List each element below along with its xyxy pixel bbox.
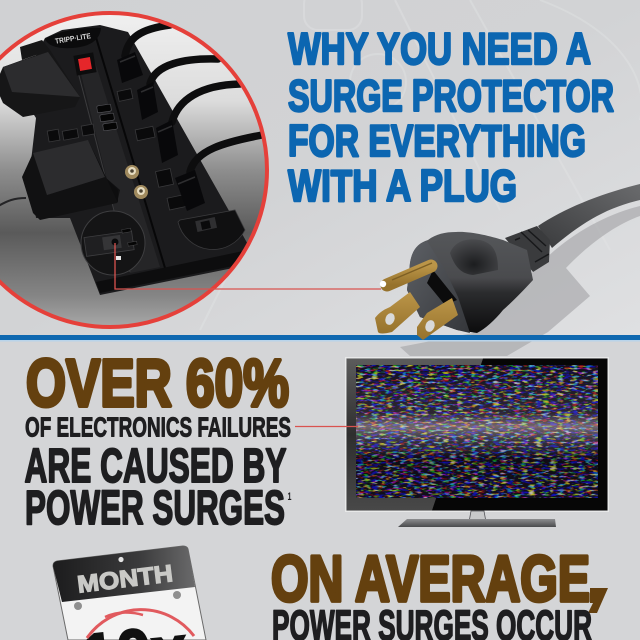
icon: electrical plug — [375, 184, 640, 340]
right blade — [417, 298, 458, 340]
tv stand — [398, 519, 556, 527]
lower left outlet — [81, 211, 145, 275]
title — [288, 25, 614, 211]
title line 4: WITH A PLUG — [288, 162, 517, 211]
television with static — [346, 358, 608, 527]
leader line: strip to plug — [115, 243, 381, 289]
tv frame — [346, 358, 608, 512]
calendar icon — [53, 546, 206, 640]
upper left adapter — [0, 40, 80, 117]
telephone jacks — [97, 104, 117, 131]
photo backdrop — [0, 13, 267, 327]
subhead line: OF ELECTRONICS FAILURES — [25, 412, 291, 442]
footnote marker: 1 — [288, 491, 292, 503]
tv static screen — [356, 365, 598, 498]
logo badge — [45, 28, 101, 48]
plug collar — [505, 226, 550, 272]
plug body silhouette — [407, 232, 533, 333]
right plugs and cords — [117, 25, 262, 211]
red power switch — [73, 52, 97, 76]
calendar header — [53, 546, 195, 602]
headline comma — [588, 588, 608, 613]
plug grip recess — [450, 239, 498, 275]
plug front face — [407, 241, 470, 333]
text block: over 60 percent — [24, 346, 292, 535]
text block: on average — [271, 543, 608, 640]
leader line: text to tv — [295, 426, 358, 428]
outlet row — [47, 89, 199, 210]
plug shadow — [400, 206, 640, 356]
tv neck — [469, 511, 486, 522]
coax connectors — [125, 165, 148, 199]
red circle outline — [0, 13, 267, 327]
lower right outlet — [178, 210, 245, 250]
cause line 2: POWER SURGES — [25, 482, 285, 535]
month label: MONTH — [76, 560, 174, 599]
left blade — [375, 292, 420, 334]
horizontal blue divider — [0, 335, 640, 342]
cause line 1: ARE CAUSED BY — [24, 440, 286, 493]
adapter cord — [0, 198, 26, 208]
ground pin — [380, 263, 432, 287]
lower left adapter — [22, 140, 120, 220]
brown stat headline: OVER 60% — [26, 346, 289, 421]
plug cable — [538, 184, 640, 248]
calendar page — [53, 546, 206, 640]
logo text: TRIPP·LITE — [54, 31, 91, 46]
strip body — [18, 25, 250, 295]
power strip photo — [0, 25, 262, 295]
plug socket slot — [427, 270, 457, 305]
binder holes — [74, 557, 181, 610]
surge protector photo circle — [0, 13, 267, 327]
